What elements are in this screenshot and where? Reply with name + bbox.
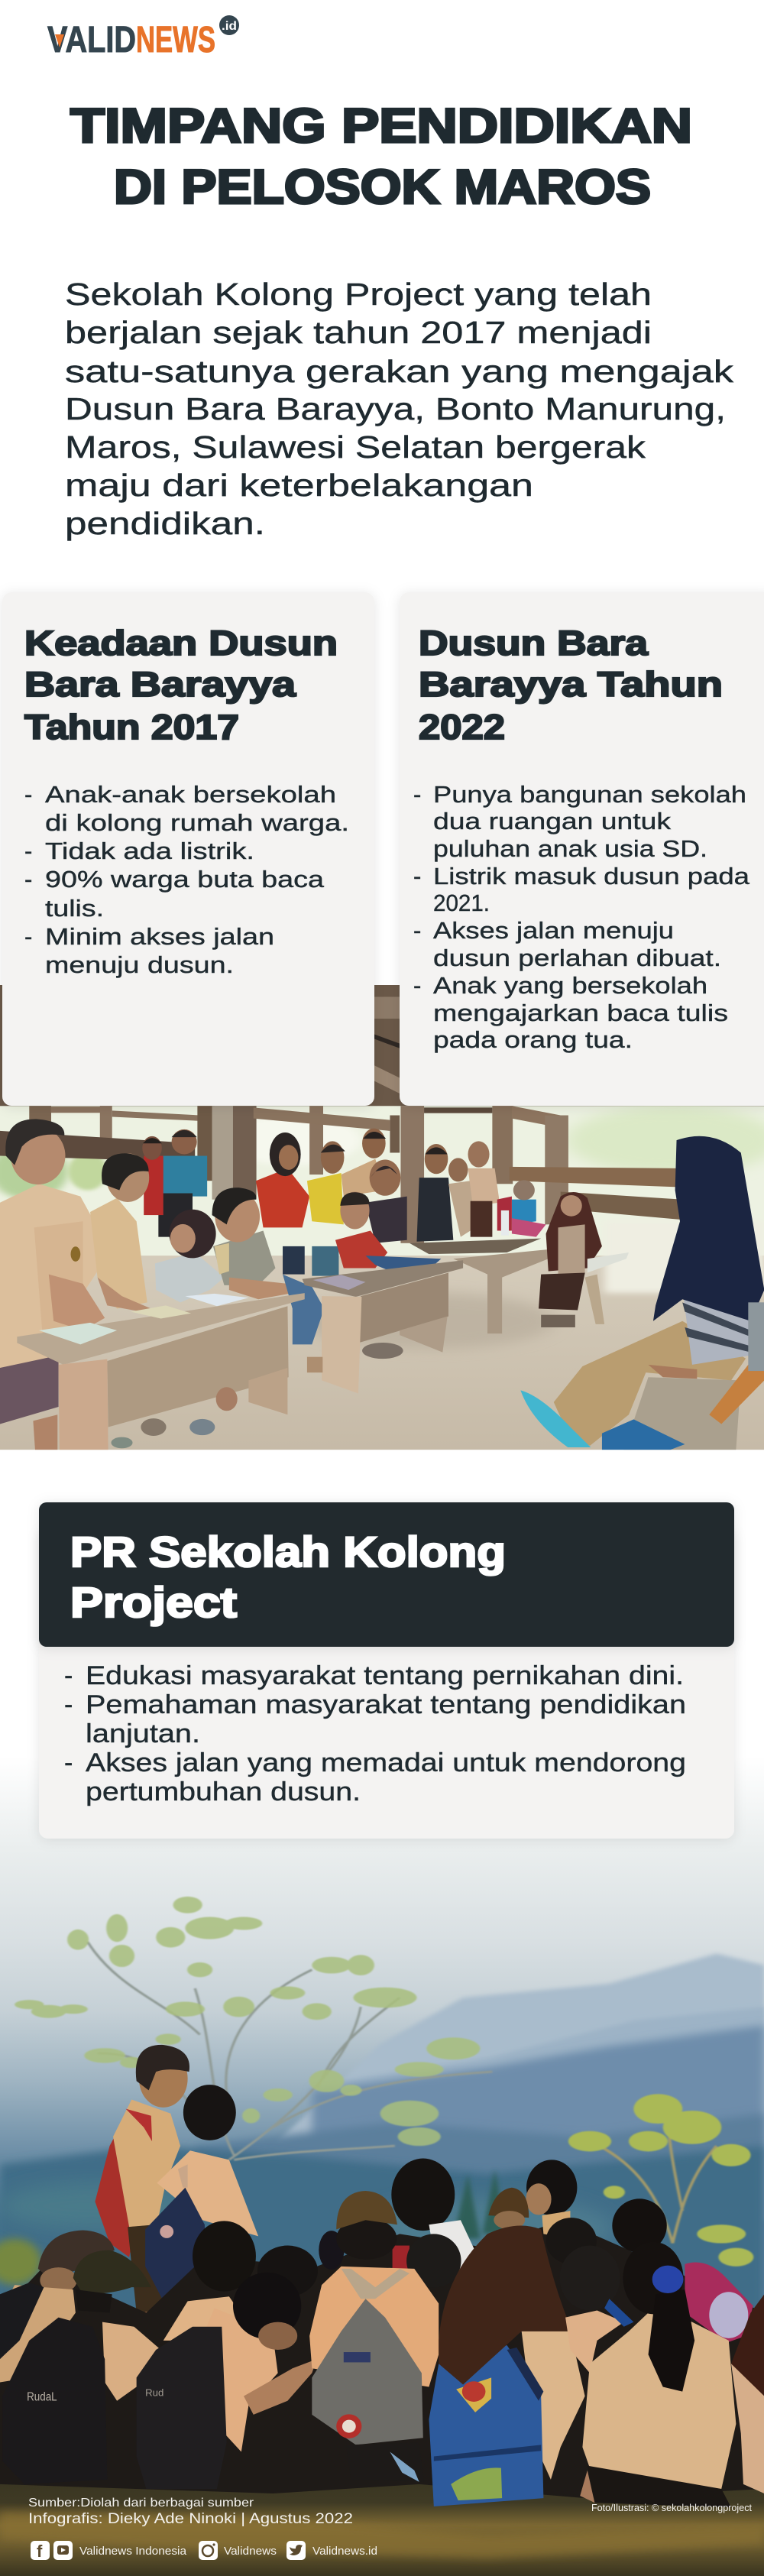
list 2022: dua ruangan untuk bbox=[433, 808, 672, 834]
small girl bbox=[155, 1210, 224, 1302]
list 2022: Listrik masuk dusun pada bbox=[433, 863, 750, 889]
standing boy with red bag bbox=[95, 2045, 189, 2341]
list 2022: pada orang tua. bbox=[433, 1026, 633, 1053]
girl with ponytail bbox=[580, 2242, 736, 2507]
feet under desks bbox=[111, 1343, 403, 1448]
list 2022: Akses jalan menuju bbox=[433, 917, 674, 944]
list 2017: Anak-anak bersekolah bbox=[45, 781, 336, 808]
pink backpack bbox=[685, 2263, 753, 2343]
list 2022: 2021. bbox=[433, 889, 490, 916]
roof beams bbox=[29, 996, 568, 1243]
icon: facebook bbox=[31, 2541, 50, 2561]
heading 2022 bbox=[419, 624, 723, 747]
left hat children bbox=[0, 2231, 161, 2401]
icon: facebook: f bbox=[37, 2542, 43, 2561]
far-right child bbox=[731, 2294, 764, 2493]
photo: classroom under house bbox=[0, 985, 764, 1450]
boy centre right bbox=[565, 2299, 634, 2372]
intro paragraph: satu-satunya gerakan yang mengajak bbox=[65, 354, 734, 389]
list 2017: - bbox=[24, 781, 32, 808]
list 2022: mengajarkan baca tulis bbox=[433, 1000, 728, 1026]
dark header bbox=[39, 1502, 734, 1647]
teacher bbox=[520, 1136, 764, 1450]
credits: Sumber:Diolah dari berbagai sumber bbox=[28, 2497, 254, 2510]
intro paragraph: pendidikan. bbox=[65, 506, 265, 541]
intro paragraph: maju dari keterbelakangan bbox=[65, 468, 533, 503]
tree left bbox=[15, 1897, 492, 2160]
list 2022: puluhan anak usia SD. bbox=[433, 835, 707, 862]
black backpack Rudal: RudaL bbox=[27, 2390, 57, 2404]
list 2022: - bbox=[413, 917, 421, 944]
middle boys and second backpack bbox=[137, 2273, 317, 2489]
panel: dusun 2022 bbox=[400, 592, 764, 1106]
list 2017: 90% warga buta baca bbox=[45, 866, 325, 893]
table right back bbox=[410, 1239, 549, 1333]
credits bbox=[28, 2497, 353, 2527]
list 2017: menuju dusun. bbox=[45, 951, 234, 978]
list PR: lanjutan. bbox=[86, 1719, 200, 1748]
list 2022: - bbox=[413, 972, 421, 999]
distant pines bbox=[455, 2171, 503, 2241]
list PR: - bbox=[64, 1661, 73, 1690]
list 2022: Punya bangunan sekolah bbox=[433, 781, 746, 808]
seated girl in maroon hijab bbox=[539, 1192, 629, 1327]
intro paragraph: Dusun Bara Barayya, Bonto Manurung, bbox=[65, 391, 726, 426]
ground sunlight bbox=[0, 2512, 764, 2558]
list PR: - bbox=[64, 1748, 73, 1777]
list 2017: Tidak ada listrik. bbox=[45, 838, 254, 864]
list 2022 bbox=[413, 781, 750, 1053]
panel: keadaan 2017 bbox=[2, 592, 374, 1106]
list 2022: - bbox=[413, 781, 421, 808]
credits: Infografis: Dieky Ade Ninoki | Agustus 2022 bbox=[28, 2511, 353, 2527]
middle boys and second backpack: Rud bbox=[145, 2387, 163, 2399]
small boy in red bbox=[335, 1191, 441, 1275]
social links: Validnews.id bbox=[312, 2545, 377, 2558]
list PR: Pemahaman masyarakat tentang pendidikan bbox=[86, 1690, 686, 1719]
desk right bbox=[303, 1260, 463, 1393]
list 2017: - bbox=[24, 838, 32, 864]
title: TIMPANG PENDIDIKAN bbox=[70, 99, 692, 153]
intro paragraph: Sekolah Kolong Project yang telah bbox=[65, 277, 652, 312]
social links: Validnews Indonesia bbox=[79, 2545, 187, 2558]
icon: youtube bbox=[53, 2541, 73, 2560]
photo credit: Foto/Ilustrasi: © sekolahkolongproject bbox=[591, 2503, 753, 2513]
standing children back row bbox=[142, 1129, 546, 1276]
list 2017: tulis. bbox=[45, 895, 104, 922]
intro paragraph: Maros, Sulawesi Selatan bergerak bbox=[65, 429, 646, 465]
heading 2022: Barayya Tahun bbox=[419, 665, 723, 704]
list 2017: di kolong rumah warga. bbox=[45, 809, 349, 836]
list PR: Edukasi masyarakat tentang pernikahan dini. bbox=[86, 1661, 684, 1690]
desk left bbox=[17, 1293, 305, 1450]
logo: Validnews.id: NEWS bbox=[136, 20, 215, 60]
boy in grey shirt bbox=[212, 1188, 322, 1345]
logo: Validnews.id bbox=[47, 15, 239, 60]
photo: children on hillside bbox=[0, 1757, 764, 2576]
heading 2017: Keadaan Dusun bbox=[24, 624, 338, 663]
tree right bbox=[568, 2094, 753, 2267]
social links: Validnews bbox=[224, 2545, 277, 2558]
title: DI PELOSOK MAROS bbox=[114, 160, 651, 214]
floor shadow bbox=[303, 1293, 555, 1350]
dark header: PR Sekolah Kolong bbox=[70, 1528, 506, 1576]
list 2022: - bbox=[413, 863, 421, 889]
black backpack Rudal bbox=[10, 2317, 105, 2401]
list 2017: - bbox=[24, 866, 32, 893]
heading 2017: Bara Barayya bbox=[24, 665, 296, 704]
heading 2017 bbox=[24, 624, 338, 747]
intro paragraph bbox=[65, 277, 734, 541]
social links bbox=[31, 2541, 377, 2561]
list PR: pertumbuhan dusun. bbox=[86, 1777, 361, 1806]
mountains bbox=[0, 1952, 764, 2294]
left greenery bbox=[0, 2238, 41, 2285]
list 2022: dusun perlahan dibuat. bbox=[433, 945, 721, 971]
list PR: Akses jalan yang memadai untuk mendorong bbox=[86, 1748, 686, 1777]
icon: instagram bbox=[199, 2541, 218, 2560]
list PR: - bbox=[64, 1690, 73, 1719]
heading 2022: 2022 bbox=[419, 708, 505, 747]
dark header: Project bbox=[70, 1578, 237, 1626]
intro paragraph: berjalan sejak tahun 2017 menjadi bbox=[65, 315, 652, 350]
heading 2017: Tahun 2017 bbox=[24, 708, 239, 747]
logo: Validnews.id: .id bbox=[222, 20, 237, 33]
heading 2022: Dusun Bara bbox=[419, 624, 649, 663]
foreground boy left bbox=[0, 1119, 105, 1450]
second standing boy with navy bag bbox=[145, 2085, 258, 2305]
list 2017 bbox=[24, 781, 349, 978]
panel: PR Sekolah Kolong Project bbox=[39, 1502, 734, 1839]
list PR bbox=[64, 1661, 686, 1806]
icon: twitter bbox=[286, 2541, 306, 2560]
logo: Validnews.id: VALID bbox=[47, 20, 136, 60]
children mid row heads bbox=[193, 2159, 667, 2296]
log and fence bbox=[0, 1131, 682, 1220]
seated group dark mass bbox=[0, 2220, 764, 2498]
girl with brown hijab and blue bag bbox=[429, 2225, 585, 2506]
title bbox=[70, 99, 692, 214]
list 2017: - bbox=[24, 923, 32, 950]
second boy bbox=[90, 1153, 151, 1312]
boy with grey backpack bbox=[309, 2191, 439, 2482]
list 2022: Anak yang bersekolah bbox=[433, 972, 707, 999]
ground bbox=[0, 2484, 764, 2576]
list 2017: Minim akses jalan bbox=[45, 923, 274, 950]
